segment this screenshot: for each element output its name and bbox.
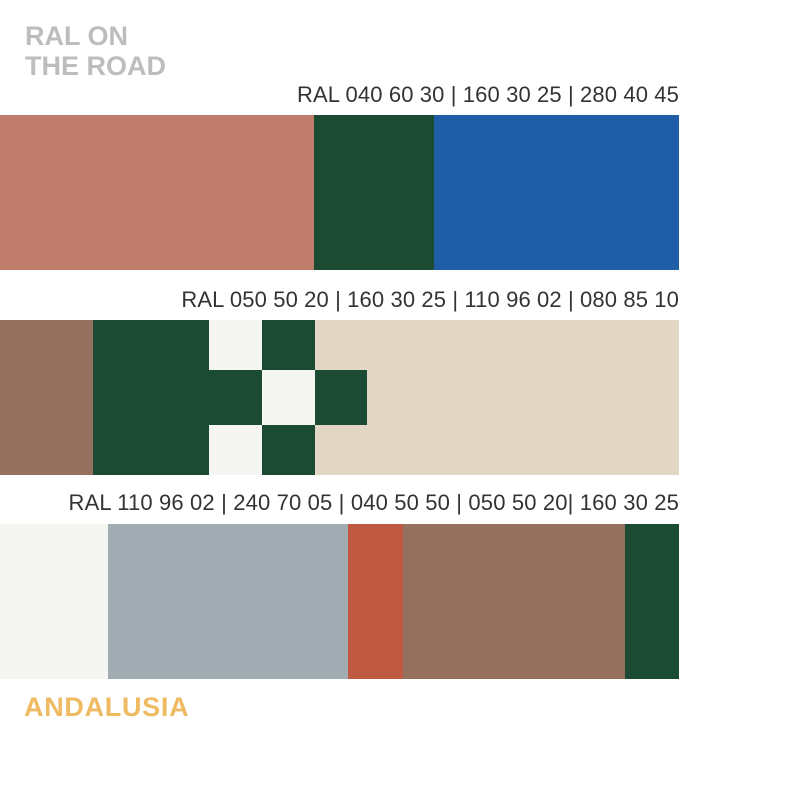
- location label: ANDALUSIA: [24, 692, 189, 722]
- panel: colour row 2: [0, 320, 679, 475]
- swatch: dark green block: [93, 320, 209, 475]
- swatch: brown: [0, 320, 93, 475]
- swatch: dark green: [625, 524, 679, 679]
- swatch: brown: [403, 524, 625, 679]
- swatch: grey: [108, 524, 348, 679]
- panel: colour row 1: [0, 115, 679, 270]
- swatch: salmon: [0, 115, 314, 270]
- caption: row 1 colour codes: RAL 040 60 30 | 160 30 25 | 280 40 45: [297, 82, 679, 107]
- title: [25, 21, 166, 81]
- swatch: red-orange: [348, 524, 403, 679]
- title: RAL ON: [25, 21, 128, 51]
- checker: green middle left: [209, 370, 262, 425]
- swatch: dark green: [314, 115, 434, 270]
- caption: row 2 colour codes: RAL 050 50 20 | 160 30 25 | 110 96 02 | 080 85 10: [181, 287, 679, 312]
- checker: off-white top: [209, 320, 262, 370]
- swatch: off-white: [0, 524, 108, 679]
- title: THE ROAD: [25, 51, 166, 81]
- checker: green middle right: [315, 370, 367, 425]
- checker: green bottom: [262, 425, 315, 475]
- checker: off-white bottom: [209, 425, 262, 475]
- swatch: beige: [315, 320, 679, 475]
- panel: colour row 3: [0, 524, 679, 679]
- caption: row 3 colour codes: RAL 110 96 02 | 240 70 05 | 040 50 50 | 050 50 20| 160 30 25: [69, 490, 679, 515]
- swatch: blue: [434, 115, 679, 270]
- checker: green top: [262, 320, 315, 370]
- checker: off-white middle: [262, 370, 315, 425]
